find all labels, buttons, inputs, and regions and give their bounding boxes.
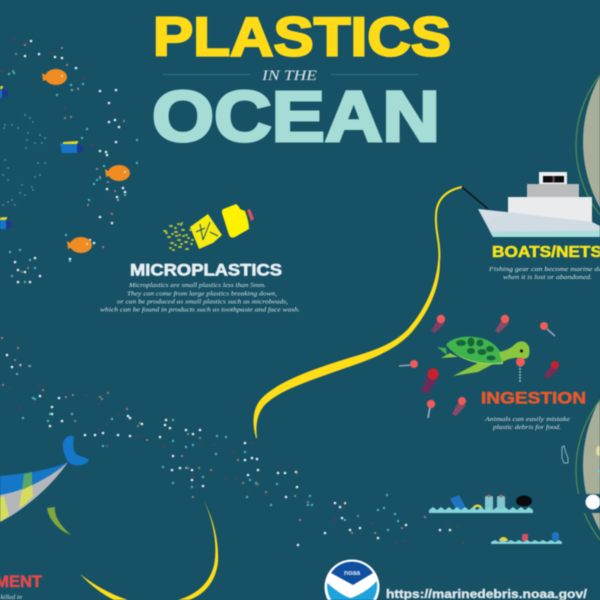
icon: shoreline debris row 2 [491, 532, 562, 544]
heading: ingestion: INGESTION [481, 389, 586, 408]
icon: orange fish 3 [67, 237, 92, 253]
text: ingestion description: plastic debris for food. [492, 424, 561, 431]
fishing rod [462, 187, 488, 209]
bottom right circle with ring [570, 329, 600, 600]
icon: plastic straw 3 [427, 400, 435, 418]
icon: bottle outline [562, 446, 568, 463]
text: ingestion description [484, 416, 570, 431]
icon: plastic bag 1 [431, 315, 445, 333]
title: OCEAN: OCEAN [152, 78, 440, 157]
text: microplastics description [100, 282, 300, 314]
debris particle field [2, 38, 463, 545]
text: microplastics description: or can be produced as small plastics such as microbeads, [117, 298, 288, 306]
text: microplastics description: They can come from large plastics breaking down, [127, 290, 277, 298]
heading: microplastics: MICROPLASTICS [130, 261, 282, 280]
icon: plastic bottle breaking into microplastics [164, 204, 254, 250]
top right circle with ring [576, 6, 600, 278]
text: microplastics description: which can be found in products such as toothpaste and face wash. [100, 306, 300, 314]
icon: red bag [544, 361, 559, 379]
title: IN THE with rules: IN THE [261, 68, 317, 84]
yellow arc: left part [80, 574, 128, 600]
icon: shoreline debris row 1 [429, 494, 533, 513]
icon: plastic straw 2 [399, 360, 418, 368]
icon: plastic bag 2 [495, 315, 509, 333]
heading: boats and nets: BOATS/NETS [492, 244, 600, 261]
icon: fishing boat [478, 172, 600, 237]
yellow fishing line [254, 186, 462, 438]
icon: blue fish 3 [0, 217, 12, 230]
icon: plastic bag 3 [452, 397, 466, 416]
noaa logo: noaa [344, 570, 360, 577]
icon: large red bag [421, 368, 439, 394]
text: boats description [488, 266, 600, 281]
icon: whale entangled in net [0, 436, 89, 522]
icon: plastic straw 1 [540, 322, 555, 336]
icon: blue fish 2 [0, 86, 8, 99]
text: boats description: Fishing gear can become marine debris [488, 266, 600, 273]
icon: orange fish 2 [105, 165, 130, 181]
title: PLASTICS: PLASTICS [153, 6, 451, 68]
icon: blue fish 1 [60, 141, 83, 154]
yellow arc: right part [178, 501, 218, 600]
text: microplastics description: Microplastics are small plastics less than 5mm. [128, 282, 266, 289]
icon: orange fish 1 [42, 69, 67, 85]
icon: kelp strand [47, 507, 71, 535]
noaa logo [324, 560, 380, 600]
text: ingestion description: Animals can easily mistake [484, 416, 570, 423]
icon: sea turtle eating plastic [437, 337, 530, 382]
text: boats description: when it is lost or abandoned. [503, 274, 592, 281]
